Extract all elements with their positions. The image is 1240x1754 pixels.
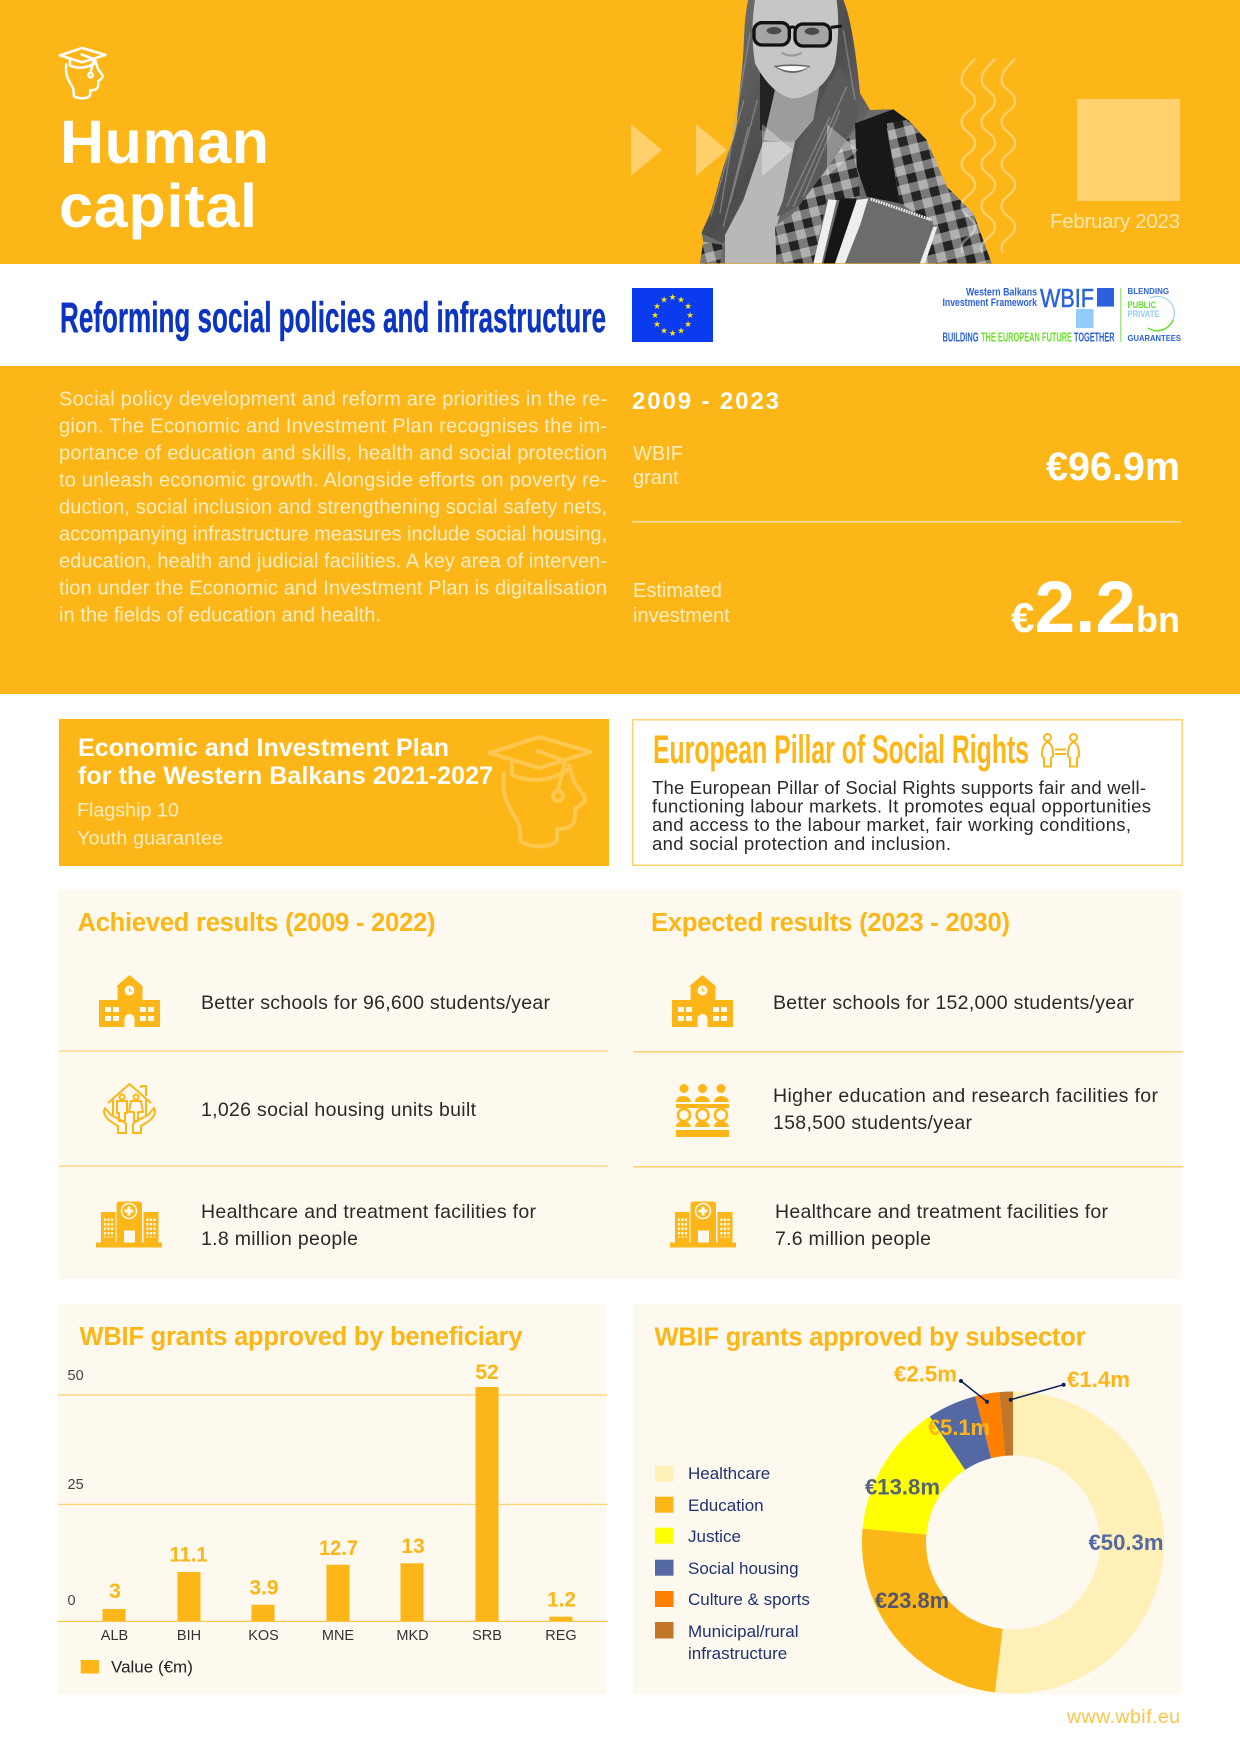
logo: blending public private guarantees bbox=[1120, 286, 1181, 343]
text: healthcare achieved: 1.8 million people bbox=[201, 1228, 358, 1250]
bar chart: 1.2 bbox=[547, 1589, 576, 1612]
donut chart: €50.3m bbox=[1088, 1530, 1164, 1555]
title: capital bbox=[59, 172, 257, 240]
stat: WBIF grant bbox=[633, 443, 1180, 489]
bar chart: BIH bbox=[177, 1628, 201, 1644]
logo: blending public private guarantees: PRIVATE bbox=[1128, 309, 1160, 319]
panel: achieved results bbox=[59, 909, 608, 1250]
wave decoration bbox=[962, 59, 1015, 253]
stat: estimated investment: investment bbox=[633, 605, 730, 627]
date: February 2023 bbox=[1050, 210, 1180, 233]
intro paragraph: to unleash economic growth. Alongside efforts on poverty re- bbox=[59, 470, 607, 492]
legend: subsectors bbox=[655, 1464, 810, 1663]
flagship text bbox=[77, 800, 223, 850]
intro paragraph: in the fields of education and health. bbox=[59, 604, 381, 626]
donut chart: €13.8m bbox=[865, 1475, 940, 1500]
icon: lecture hall bbox=[676, 1084, 729, 1137]
text: higher education: Higher education and research facilities for bbox=[773, 1085, 1158, 1107]
legend: subsectors: Social housing bbox=[688, 1559, 799, 1578]
heading: subsector chart: WBIF grants approved by subsector bbox=[654, 1324, 1086, 1352]
panel: grants by subsector bbox=[633, 1304, 1181, 1694]
text: healthcare expected: Healthcare and treatment facilities for bbox=[775, 1201, 1108, 1223]
icon: equal people bbox=[1042, 734, 1079, 766]
bar chart: 13 bbox=[401, 1535, 425, 1558]
intro paragraph: Social policy development and reform are priorities in the re- bbox=[59, 388, 607, 410]
divider bbox=[632, 521, 1181, 522]
bar chart: MNE bbox=[322, 1628, 354, 1644]
intro paragraph: education, health and judicial facilities. A key area of interven- bbox=[59, 550, 607, 572]
icon: EU flag: ★ bbox=[677, 326, 685, 336]
icon: hospital bbox=[670, 1202, 736, 1248]
intro paragraph: duction, social inclusion and strengthening social safety nets, bbox=[59, 496, 607, 518]
bar chart: 52 bbox=[475, 1361, 499, 1384]
footer url: www.wbif.eu bbox=[1066, 1706, 1180, 1728]
legend: subsectors: Municipal/rural bbox=[688, 1622, 799, 1641]
stat: estimated investment bbox=[633, 567, 1180, 648]
logo: WBIF: THE EUROPEAN FUTURE bbox=[981, 330, 1072, 344]
bar chart: 50 bbox=[68, 1368, 84, 1384]
intro paragraph bbox=[59, 388, 607, 626]
pillar body bbox=[652, 777, 1151, 854]
legend: subsectors: Education bbox=[688, 1496, 764, 1515]
logo: blending public private guarantees: GUARANTEES bbox=[1128, 333, 1181, 343]
title: Human bbox=[60, 108, 269, 176]
logo: WBIF bbox=[942, 283, 1115, 344]
icon: EU flag: ★ bbox=[660, 326, 668, 336]
donut chart: €23.8m bbox=[875, 1588, 949, 1613]
flagship text: Youth guarantee bbox=[77, 828, 223, 850]
icon: EU flag: ★ bbox=[684, 301, 692, 311]
panel: Economic and Investment Plan bbox=[59, 719, 609, 866]
text: social housing units: 1,026 social housing units built bbox=[201, 1099, 477, 1121]
icon: head with graduation cap bbox=[60, 48, 105, 98]
legend: subsectors: Culture & sports bbox=[688, 1590, 810, 1609]
logo: WBIF: WBIF bbox=[1040, 283, 1094, 313]
donut chart: €2.5m bbox=[894, 1362, 957, 1387]
bar chart: MKD bbox=[396, 1628, 429, 1644]
panel: expected results bbox=[634, 909, 1183, 1250]
donut chart: €1.4m bbox=[1067, 1367, 1130, 1392]
flagship text: Flagship 10 bbox=[77, 800, 179, 822]
pillar body: and access to the labour market, fair working conditions, bbox=[652, 814, 1131, 835]
arrows over photo bbox=[762, 124, 858, 176]
donut chart: €5.1m bbox=[928, 1415, 990, 1440]
stat: estimated investment: €2.2bn bbox=[1011, 567, 1180, 648]
bar chart: SRB bbox=[472, 1628, 502, 1644]
text: healthcare expected bbox=[775, 1201, 1108, 1250]
bar chart: 25 bbox=[68, 1477, 84, 1493]
bar chart: 11.1 bbox=[170, 1544, 208, 1567]
legend: subsectors: infrastructure bbox=[688, 1644, 787, 1663]
heading: achieved results: Achieved results (2009 - 2022) bbox=[78, 909, 436, 937]
text: better schools: Better schools for 96,600 students/year bbox=[201, 992, 550, 1014]
pillar body: The European Pillar of Social Rights supports fair and well- bbox=[652, 777, 1146, 798]
icon: EU flag: ★ bbox=[653, 319, 661, 329]
period heading: 2009 - 2023 bbox=[632, 388, 779, 415]
legend: subsectors: Justice bbox=[688, 1527, 741, 1546]
text: healthcare achieved: Healthcare and treatment facilities for bbox=[201, 1201, 536, 1223]
text: healthcare achieved bbox=[201, 1201, 536, 1250]
logo: WBIF: TOGETHER bbox=[1074, 330, 1115, 344]
icon: EU flag: ★ bbox=[660, 294, 668, 304]
intro paragraph: gion. The Economic and Investment Plan recognises the im- bbox=[59, 416, 607, 438]
bar chart: ALB bbox=[101, 1628, 128, 1644]
stat: WBIF grant: WBIF bbox=[633, 443, 683, 465]
panel heading bbox=[78, 734, 493, 790]
panel heading: for the Western Balkans 2021-2027 bbox=[78, 762, 493, 790]
decorative square bbox=[1077, 99, 1180, 201]
subtitle: Reforming social policies and infrastructure bbox=[60, 294, 606, 342]
panel heading: Economic and Investment Plan bbox=[78, 734, 449, 762]
header band bbox=[0, 0, 1240, 264]
icon: school bbox=[99, 975, 160, 1027]
logo: blending public private guarantees: BLENDING bbox=[1128, 286, 1169, 296]
logo: WBIF: Investment Framework bbox=[942, 297, 1038, 309]
chart legend: Value (€m) bbox=[111, 1658, 193, 1677]
bar chart: REG bbox=[545, 1628, 577, 1644]
icon: EU flag: ★ bbox=[651, 310, 659, 320]
text: healthcare expected: 7.6 million people bbox=[775, 1228, 931, 1250]
text: higher education: 158,500 students/year bbox=[773, 1112, 972, 1134]
icon: EU flag: ★ bbox=[684, 319, 692, 329]
stat: estimated investment: Estimated bbox=[633, 580, 722, 602]
icon: EU flag: ★ bbox=[677, 294, 685, 304]
intro band bbox=[0, 366, 1240, 694]
icon: EU flag: ★ bbox=[686, 310, 694, 320]
icon: faint head with cap bbox=[490, 737, 591, 846]
arrows behind photo bbox=[631, 124, 727, 176]
icon: EU flag: ★ bbox=[669, 328, 677, 338]
bar chart: KOS bbox=[248, 1628, 279, 1644]
heading: beneficiary chart: WBIF grants approved by beneficiary bbox=[80, 1323, 523, 1351]
legend: subsectors: Healthcare bbox=[688, 1464, 770, 1483]
pillar body: and social protection and inclusion. bbox=[652, 833, 951, 854]
bar chart: 3 bbox=[109, 1580, 121, 1603]
bar chart: 12.7 bbox=[319, 1537, 358, 1560]
icon: social housing bbox=[104, 1084, 155, 1133]
stat: WBIF grant: €96.9m bbox=[1046, 445, 1180, 489]
bar chart: 0 bbox=[68, 1593, 76, 1609]
icon: EU flag: ★ bbox=[653, 301, 661, 311]
panel: results bbox=[59, 890, 1181, 1279]
pillar body: functioning labour markets. It promotes equal opportunities bbox=[652, 796, 1151, 816]
intro paragraph: tion under the Economic and Investment Plan is digitalisation bbox=[59, 578, 607, 600]
text: better schools expected: Better schools for 152,000 students/year bbox=[773, 992, 1134, 1014]
icon: school bbox=[672, 975, 733, 1027]
bar chart: 3.9 bbox=[250, 1577, 278, 1600]
photo: student with books bbox=[700, 0, 992, 263]
panel: European Pillar of Social Rights bbox=[633, 720, 1182, 865]
heading: expected results: Expected results (2023 - 2030) bbox=[651, 909, 1010, 937]
title bbox=[59, 108, 269, 240]
text: higher education bbox=[773, 1085, 1158, 1134]
donut chart bbox=[865, 1362, 1164, 1662]
intro paragraph: accompanying infrastructure measures include social housing, bbox=[59, 524, 607, 546]
stat: WBIF grant: grant bbox=[633, 467, 679, 489]
icon: EU flag bbox=[632, 288, 713, 342]
icon: EU flag: ★ bbox=[669, 292, 677, 302]
icon: hospital bbox=[96, 1202, 162, 1248]
logo: WBIF: BUILDING bbox=[942, 330, 978, 344]
panel: grants by beneficiary bbox=[58, 1304, 608, 1694]
intro paragraph: portance of education and skills, health and social protection bbox=[59, 442, 607, 464]
bar chart bbox=[58, 1361, 608, 1644]
logo: blending public private guarantees: PUBLIC bbox=[1128, 300, 1156, 310]
logo: WBIF: Western Balkans bbox=[966, 286, 1037, 298]
